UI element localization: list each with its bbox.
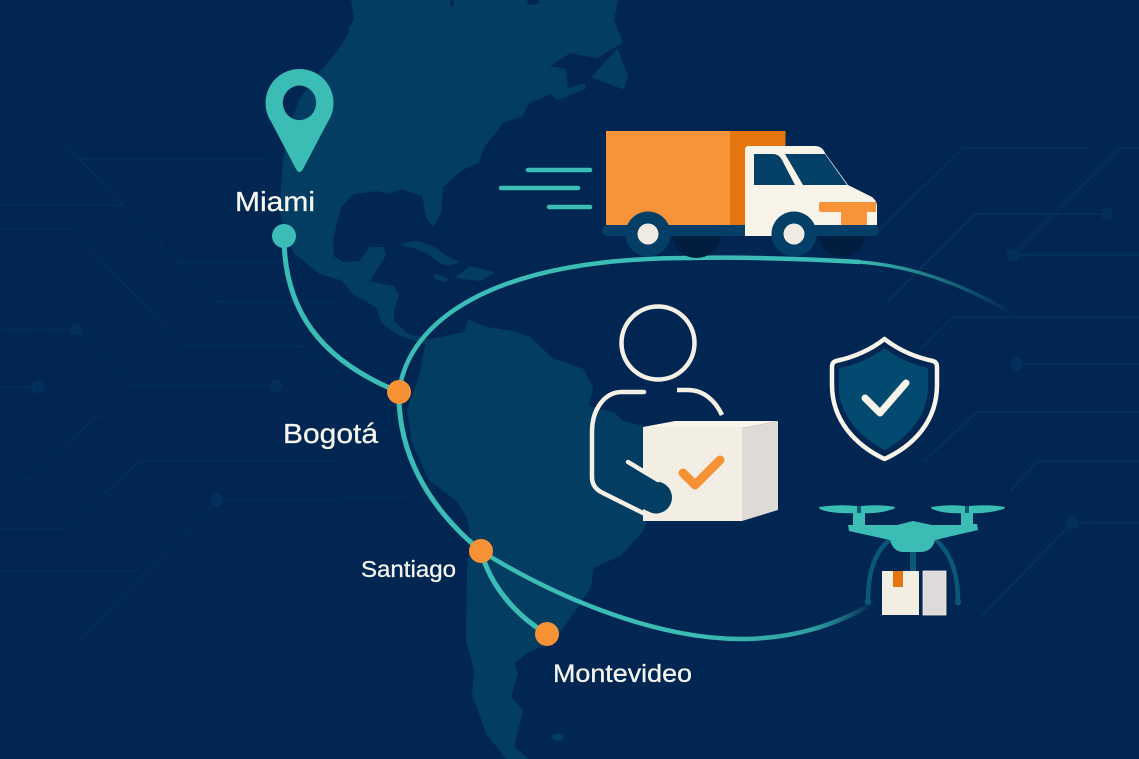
wheel shadows: [673, 236, 720, 258]
node: Montevideo: [535, 622, 559, 646]
hand: [643, 472, 672, 514]
route: Miami to Bogotá: [284, 236, 399, 392]
map: Jamaica: [435, 275, 447, 281]
wheels: [626, 212, 670, 256]
shoulders and arm: [592, 392, 645, 514]
route: upper arc from Bogotá: [399, 258, 860, 392]
icon: person holding box: [592, 306, 778, 521]
propellers: [819, 505, 857, 513]
label: Miami: Miami: [235, 186, 315, 217]
cab: [745, 146, 877, 236]
map: Falkland Islands: [553, 734, 563, 740]
route: Santiago to Montevideo: [481, 551, 547, 634]
map: Cuba: [403, 242, 458, 264]
icon: speed lines: [501, 170, 590, 207]
box: [643, 421, 778, 428]
box checkmark: [683, 460, 720, 485]
node: Miami: [272, 224, 296, 248]
route: Bogotá to Santiago: [399, 392, 481, 551]
icon: delivery drone: [819, 505, 1005, 615]
icon: security shield: [832, 339, 937, 459]
route: lower arc from Santiago: [481, 551, 872, 639]
chassis: [602, 225, 879, 236]
body: [848, 513, 978, 552]
map: Hispaniola: [457, 267, 493, 280]
map: South America: [408, 320, 655, 759]
route: upper arc fading end: [860, 262, 1013, 314]
headlight trim: [819, 202, 876, 225]
label: Montevideo: Montevideo: [553, 660, 692, 688]
map: North and Central America: [281, 0, 622, 377]
node: Santiago: [469, 539, 493, 563]
map: Newfoundland: [593, 50, 627, 88]
icon: delivery truck: [602, 131, 879, 258]
cargo box: [606, 131, 730, 225]
label: Santiago: Santiago: [361, 556, 456, 582]
map: Americas landmass: [281, 0, 655, 759]
icon: location pin: [266, 69, 334, 172]
legs: [868, 541, 888, 602]
label: Bogotá: Bogotá: [283, 418, 378, 449]
node: Bogotá: [387, 380, 411, 404]
parcel: [882, 571, 919, 615]
head: [622, 306, 694, 380]
